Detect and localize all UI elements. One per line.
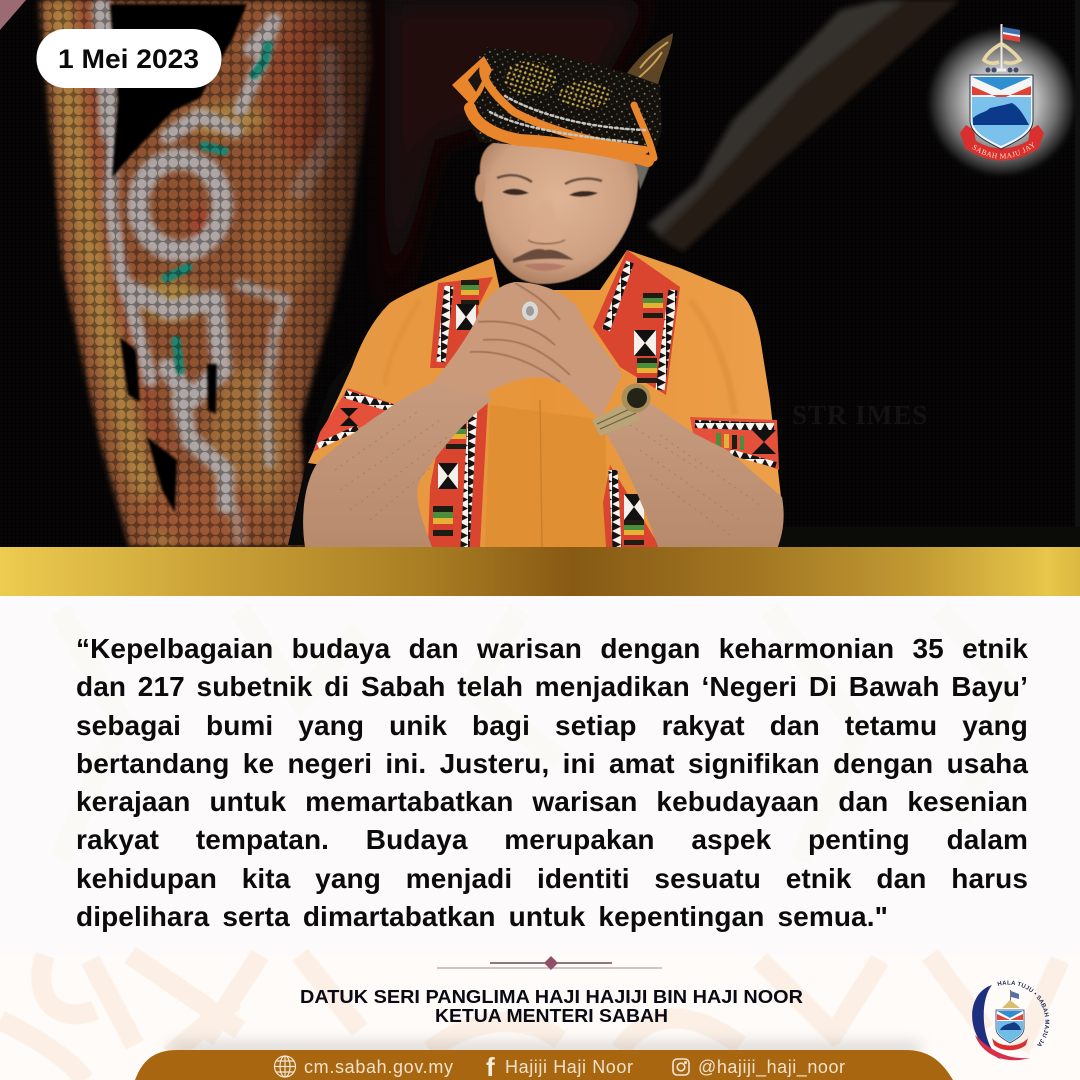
person: Datuk Seri Hajiji in orange shirt and traditional headwear — [288, 33, 784, 547]
icon: instagram — [673, 1059, 689, 1075]
signatory name and title: DATUK SERI PANGLIMA HAJI HAJIJI BIN HAJI NOOR — [300, 987, 803, 1007]
shield — [970, 75, 1033, 149]
footer contact bar: cm.sabah.gov.my — [304, 1057, 453, 1077]
sleeve band left — [313, 388, 397, 452]
white bead clusters — [102, 8, 336, 540]
signatory name and title: KETUA MENTERI SABAH — [435, 1006, 668, 1026]
logo: Hala Tuju Sabah Maju Jaya: HALA TUJU • SABAH MAJU JAYA — [997, 980, 1050, 1046]
date badge — [36, 29, 222, 88]
arm left — [303, 383, 492, 547]
shirt body — [308, 250, 781, 547]
footer contact bar — [135, 1042, 953, 1080]
table edge — [780, 527, 1080, 547]
white quote panel pattern — [60, 610, 1010, 860]
signatory name and title — [300, 987, 803, 1026]
lips — [524, 263, 566, 271]
wreath — [986, 68, 1018, 72]
date badge: 1 Mei 2023 — [58, 44, 199, 74]
quote text block: dipelihara serta dimartabatkan untuk kepentingan semua." — [76, 901, 888, 932]
moustache — [513, 249, 574, 263]
quote text block: bertandang ke negeri ini. Justeru, ini amat signifikan dengan usaha — [76, 748, 1028, 779]
placket upper left — [430, 277, 493, 368]
headwear: patterned tanjak — [452, 33, 673, 165]
watch — [592, 384, 650, 436]
dark gaps — [110, 4, 247, 513]
raised arms — [984, 44, 1020, 63]
footer contact bar: Hajiji Haji Noor — [505, 1057, 633, 1077]
placket lower right — [603, 465, 660, 547]
footer contact bar: @hajiji_haji_noor — [698, 1057, 845, 1078]
placket upper right — [593, 250, 680, 395]
photo panel: dark stage background — [0, 0, 1080, 547]
diagonal bead streak — [648, 0, 960, 252]
quote text block: sebagai bumi yang unik bagi setiap rakyat dan tetamu yang — [76, 710, 1028, 741]
head — [475, 135, 650, 284]
arm hair texture — [335, 410, 760, 535]
flag — [1000, 24, 1002, 69]
quote text block: “Kepelbagaian budaya dan warisan dengan keharmonian 35 etnik — [76, 633, 1028, 664]
brows — [497, 175, 532, 182]
placket lower left — [428, 400, 488, 547]
quote text block: dan 217 subetnik di Sabah telah menjadikan ‘Negeri Di Bawah Bayu’ — [76, 671, 1028, 702]
textile backdrop: beaded pattern — [36, 0, 650, 547]
bead grid overlay — [36, 0, 376, 547]
quote text block: rakyat tempatan. Budaya merupakan aspek penting dalam — [76, 824, 1028, 855]
chair — [288, 355, 395, 545]
crest: Sabah state coat of arms — [928, 24, 1075, 176]
divider ornament — [437, 956, 662, 970]
footer panel: peach pattern background — [0, 955, 1080, 1080]
ring — [522, 302, 538, 320]
eyes — [502, 189, 529, 195]
icon: globe — [274, 1056, 296, 1077]
sleeve band right — [690, 417, 779, 470]
quote text block — [76, 633, 1028, 932]
gold band — [0, 547, 1080, 596]
arm right — [600, 403, 784, 547]
nose — [528, 200, 563, 245]
faint watermark: STR IMES — [792, 400, 928, 430]
clasped hands — [433, 282, 622, 420]
teal accents — [166, 45, 268, 370]
quote text block: kerajaan untuk memartabatkan warisan kebudayaan dan kesenian — [76, 786, 1028, 817]
quote text block: kehidupan kita yang menjadi identiti sesuatu etnik dan harus — [76, 863, 1028, 894]
scroll — [960, 125, 1044, 154]
